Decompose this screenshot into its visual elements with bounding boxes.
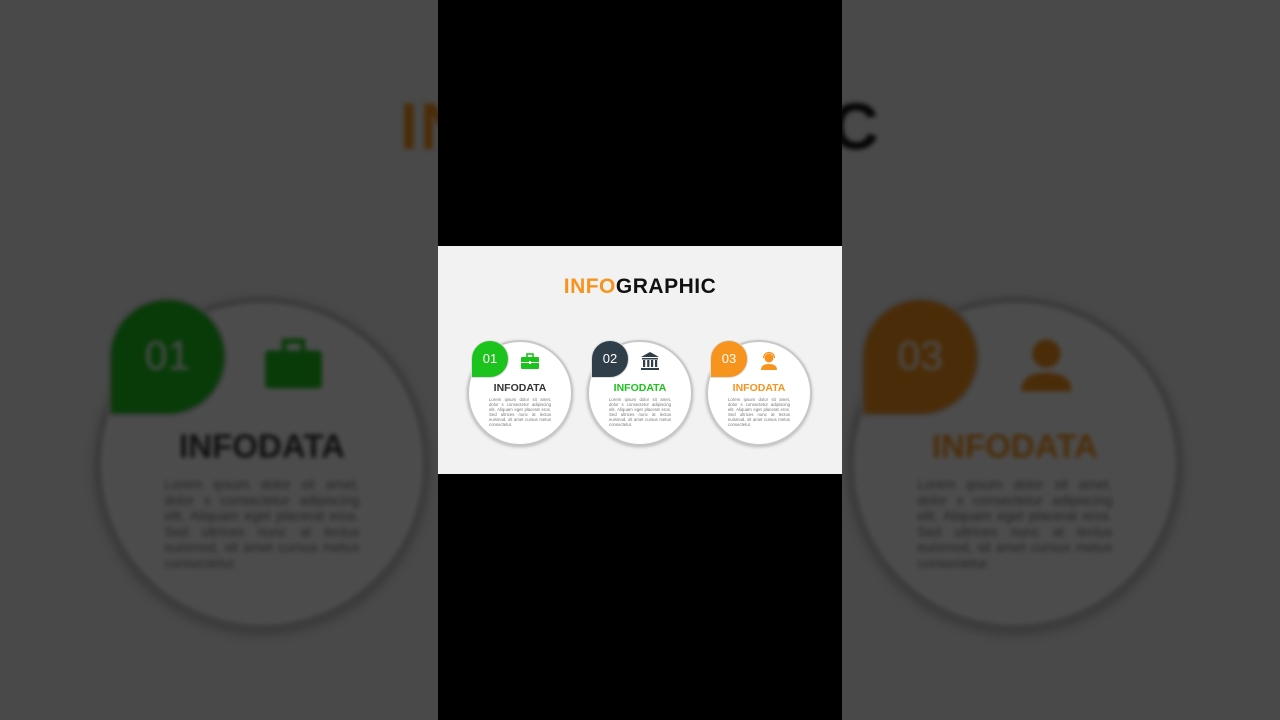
body text 03: Lorem ipsum dolor sit amet, dolor s consectetur adipiscing elit. Aliquam eget placerat eros. Sed ultrices nunc at lectus euismod, sit amet cursus metus consectetur. (728, 397, 790, 427)
blurred background copy of the infographic: INFODATA (179, 429, 345, 467)
blurred background copy of the infographic: Lorem ipsum dolor sit amet, dolor s consectetur adipiscing elit. Aliquam eget placerat eros. Sed ultrices nunc at lectus euismod, sit amet cursus metus consectetur. (917, 477, 1112, 573)
heading 01: INFODATA (494, 382, 546, 394)
heading 03: INFODATA (733, 382, 785, 394)
body text 02: Lorem ipsum dolor sit amet, dolor s consectetur adipiscing elit. Aliquam eget placerat eros. Sed ultrices nunc at lectus euismod, sit amet cursus metus consectetur. (609, 397, 671, 427)
heading 02: INFODATA (614, 382, 666, 394)
blurred background copy of the infographic: 03 (898, 332, 943, 379)
black band top (438, 0, 842, 246)
black band bottom (438, 474, 842, 720)
blurred background copy of the infographic: INFOGRAPHIC (400, 92, 880, 165)
card 03 (704, 340, 814, 448)
badge 02: 02 (603, 351, 617, 366)
badge 02 (591, 340, 629, 378)
card 01 (466, 340, 574, 448)
badge 01 (471, 340, 509, 378)
badge 03 (710, 340, 748, 378)
main infographic slide (438, 246, 842, 474)
badge 03: 03 (722, 351, 736, 366)
icon: support person (761, 352, 777, 370)
body text 01: Lorem ipsum dolor sit amet, dolor s consectetur adipiscing elit. Aliquam eget placerat eros. Sed ultrices nunc at lectus euismod, sit amet cursus metus consectetur. (489, 397, 551, 427)
blurred background copy of the infographic: INFODATA (932, 429, 1098, 467)
badge 01: 01 (483, 351, 497, 366)
blurred background copy of the infographic: 01 (145, 332, 190, 379)
icon: bank (641, 352, 659, 370)
card 02 (586, 340, 694, 448)
title: INFOGRAPHIC (564, 275, 716, 298)
icon: briefcase (521, 353, 539, 369)
blurred background copy of the infographic: Lorem ipsum dolor sit amet, dolor s consectetur adipiscing elit. Aliquam eget placerat eros. Sed ultrices nunc at lectus euismod, sit amet cursus metus consectetur. (164, 477, 360, 573)
